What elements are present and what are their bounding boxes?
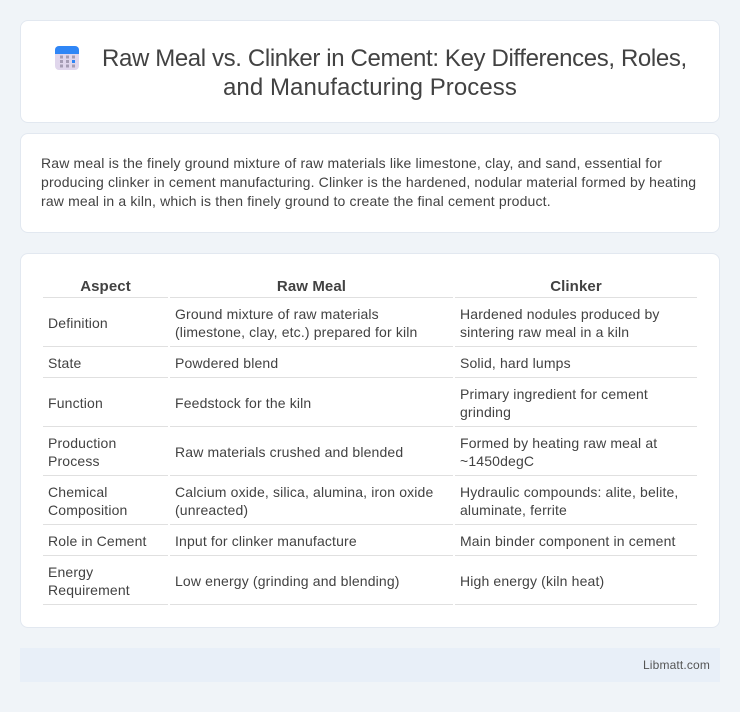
clinker production process: ~1450degC bbox=[460, 453, 534, 469]
comparison table panel bbox=[20, 253, 720, 628]
footer bar bbox=[20, 648, 720, 682]
raw meal chemical composition: (unreacted) bbox=[175, 502, 248, 518]
raw meal production process: Raw materials crushed and blended bbox=[175, 444, 403, 460]
raw meal role: Input for clinker manufacture bbox=[175, 533, 357, 549]
raw meal definition: (limestone, clay, etc.) prepared for kiln bbox=[175, 324, 417, 340]
clinker role: Main binder component in cement bbox=[460, 533, 676, 549]
intro paragraph: Raw meal is the finely ground mixture of raw materials like limestone, clay, and sand, essential for bbox=[41, 155, 662, 171]
clinker chemical composition bbox=[460, 484, 678, 518]
title: and Manufacturing Process bbox=[223, 74, 517, 101]
raw meal definition: Ground mixture of raw materials bbox=[175, 306, 379, 322]
clinker definition: Hardened nodules produced by bbox=[460, 306, 660, 322]
intro paragraph: producing clinker in cement manufacturing. Clinker is the hardened, nodular material formed by heating bbox=[41, 174, 696, 190]
row: energy requirement: Requirement bbox=[48, 582, 130, 598]
icon: calendar bbox=[55, 46, 79, 70]
raw meal function: Feedstock for the kiln bbox=[175, 395, 311, 411]
row: energy requirement bbox=[48, 564, 130, 598]
clinker definition: sintering raw meal in a kiln bbox=[460, 324, 629, 340]
table header: raw meal: Raw Meal bbox=[277, 278, 346, 295]
row: role in cement: Role in Cement bbox=[48, 533, 147, 549]
raw meal chemical composition: Calcium oxide, silica, alumina, iron oxide bbox=[175, 484, 433, 500]
clinker definition bbox=[460, 306, 660, 340]
row: chemical composition bbox=[48, 484, 127, 518]
row: production process: Process bbox=[48, 453, 100, 469]
clinker chemical composition: aluminate, ferrite bbox=[460, 502, 567, 518]
row: production process bbox=[48, 435, 116, 469]
clinker production process bbox=[460, 435, 658, 469]
clinker production process: Formed by heating raw meal at bbox=[460, 435, 657, 451]
intro paragraph bbox=[41, 155, 696, 209]
raw meal chemical composition bbox=[175, 484, 433, 518]
clinker function: grinding bbox=[460, 404, 511, 420]
clinker energy: High energy (kiln heat) bbox=[460, 573, 604, 589]
row: state: State bbox=[48, 355, 81, 371]
table header: clinker: Clinker bbox=[550, 278, 602, 295]
clinker function: Primary ingredient for cement bbox=[460, 386, 648, 402]
intro paragraph: raw meal in a kiln, which is then finely ground to create the final cement product. bbox=[41, 193, 551, 209]
title: Raw Meal vs. Clinker in Cement: Key Differences, Roles, bbox=[102, 45, 687, 72]
clinker function bbox=[460, 386, 648, 420]
row: energy requirement: Energy bbox=[48, 564, 93, 580]
raw meal definition bbox=[175, 306, 417, 340]
footer credit: Libmatt.com bbox=[643, 658, 710, 672]
clinker state: Solid, hard lumps bbox=[460, 355, 571, 371]
row: function: Function bbox=[48, 395, 103, 411]
raw meal energy: Low energy (grinding and blending) bbox=[175, 573, 400, 589]
row: definition: Definition bbox=[48, 315, 108, 331]
table header: aspect: Aspect bbox=[80, 278, 131, 295]
clinker chemical composition: Hydraulic compounds: alite, belite, bbox=[460, 484, 678, 500]
header card bbox=[20, 20, 720, 123]
row: chemical composition: Composition bbox=[48, 502, 127, 518]
title bbox=[102, 45, 687, 101]
row: chemical composition: Chemical bbox=[48, 484, 108, 500]
row: production process: Production bbox=[48, 435, 116, 451]
raw meal state: Powdered blend bbox=[175, 355, 278, 371]
intro text panel bbox=[20, 133, 720, 233]
